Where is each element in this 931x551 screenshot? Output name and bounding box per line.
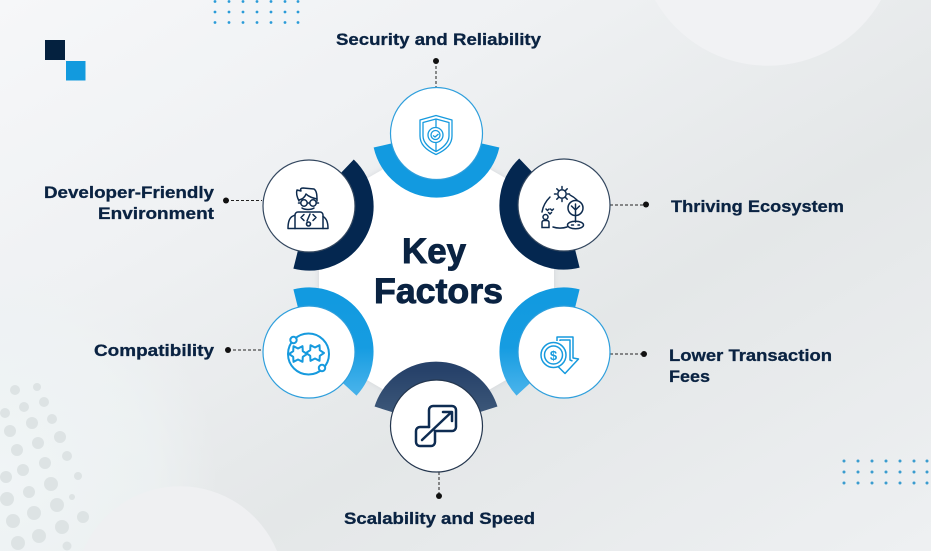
label: Lower Transaction Fees: Lower Transaction [669, 346, 832, 365]
halftone dots [0, 383, 89, 550]
connector: compatibility [225, 347, 263, 353]
label: Developer-Friendly Environment [44, 183, 215, 223]
heading: Key Factors [374, 232, 503, 311]
label: Developer-Friendly Environment: Developer-Friendly [44, 183, 215, 202]
node: lower transaction fees [518, 306, 610, 398]
arc: transaction fees [509, 297, 577, 389]
heading: Key Factors: Key [402, 232, 467, 271]
pale circle top right [655, 0, 881, 66]
pale circle bottom left [83, 486, 277, 551]
connector: developer [223, 198, 262, 204]
arc: compatibility [296, 297, 364, 389]
node: compatibility [263, 306, 355, 398]
icon: coin and down arrow: $ [550, 348, 558, 363]
heading: Key Factors: Factors [374, 272, 503, 311]
connector: scalability [436, 472, 442, 499]
node: security [390, 88, 482, 180]
icon: puzzle gears [288, 334, 329, 374]
node: developer [263, 160, 355, 252]
icon: sun, tree and person [542, 186, 584, 229]
label: Thriving Ecosystem: Thriving Ecosystem [671, 197, 844, 216]
label: Developer-Friendly Environment: Environment [98, 204, 214, 223]
blue dot grid bottom right [842, 460, 928, 484]
label: Lower Transaction Fees [669, 346, 832, 386]
label: Compatibility: Compatibility [94, 341, 215, 360]
node: ecosystem [518, 159, 610, 251]
logo squares [45, 40, 86, 80]
icon: developer with laptop [288, 188, 328, 228]
arc: ecosystem [509, 165, 577, 260]
arc: scalability [384, 371, 488, 409]
arc: developer [296, 166, 364, 261]
connector: fees [610, 351, 647, 357]
central hexagon [319, 139, 554, 420]
label: Scalability and Speed: Scalability and Speed [344, 509, 535, 528]
arc: security [383, 145, 490, 188]
icon: shield [420, 116, 452, 154]
connector: ecosystem [610, 202, 649, 208]
blue dot grid top [214, 0, 299, 24]
icon: expand arrow squares [416, 406, 456, 446]
label: Security and Reliability: Security and Reliability [336, 30, 542, 49]
connector: security [433, 58, 439, 87]
label: Lower Transaction Fees: Fees [669, 367, 710, 386]
node: scalability [390, 380, 482, 472]
